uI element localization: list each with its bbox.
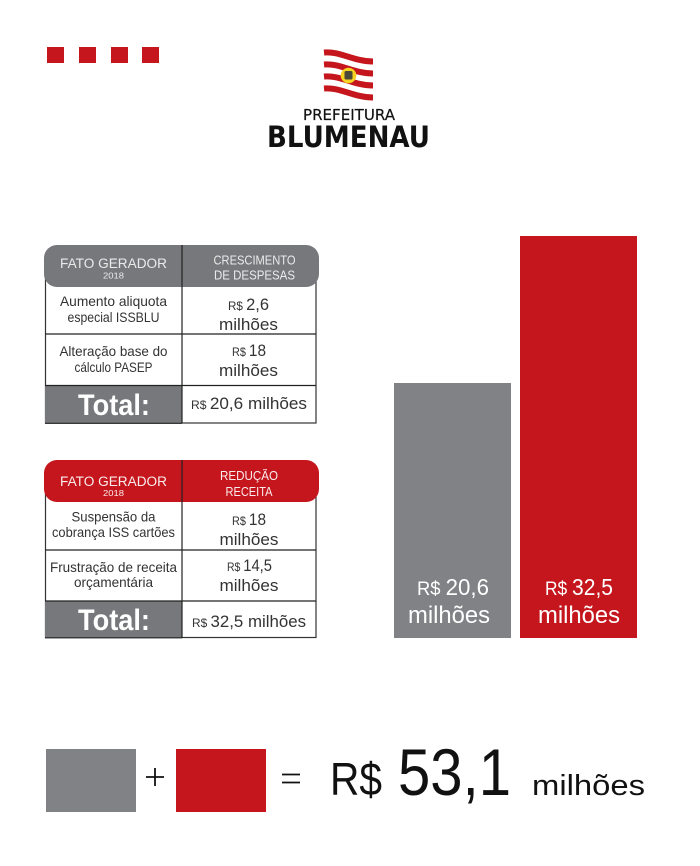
row 2 <box>50 556 278 595</box>
header labels: REDUÇÃO <box>220 469 278 483</box>
row 2: orçamentária <box>74 574 153 590</box>
row 1 <box>52 508 278 549</box>
total row <box>78 604 306 637</box>
total row: Total: <box>78 604 150 637</box>
row 2: cálculo PASEP <box>74 359 152 375</box>
row 2: R$ 14,5 <box>227 556 272 575</box>
row 1: milhões <box>220 530 278 549</box>
logo text: PREFEITURA: PREFEITURA <box>303 106 396 124</box>
total value <box>330 735 645 809</box>
header labels <box>60 254 296 282</box>
row 1: Suspensão da <box>72 508 156 524</box>
bar: despesas 20,6: milhões <box>408 602 490 629</box>
logo text: BLUMENAU: BLUMENAU <box>267 120 430 154</box>
total value: milhões <box>532 770 645 802</box>
total row: R$ 32,5 milhões <box>192 612 306 631</box>
header labels: CRESCIMENTO <box>214 254 296 268</box>
header labels: RECEITA <box>226 485 273 499</box>
logo: Prefeitura Blumenau <box>267 52 430 154</box>
icon: striped flag with crest <box>324 52 373 98</box>
bar: despesas 20,6 <box>394 383 511 638</box>
row 1: Aumento aliquota <box>60 293 167 309</box>
header labels: 2018 <box>103 489 125 498</box>
header labels: DE DESPESAS <box>214 268 295 282</box>
header labels <box>60 469 278 499</box>
bar chart <box>394 236 637 638</box>
legend swatch: red <box>176 749 266 812</box>
row 1: especial ISSBLU <box>68 309 160 325</box>
row 2: R$ 18 <box>232 341 266 360</box>
total row <box>78 389 307 422</box>
total value: 53,1 <box>398 735 511 809</box>
row 1 <box>60 293 278 334</box>
row 1: R$ 18 <box>232 510 266 529</box>
header row, red <box>44 460 319 502</box>
row 1: cobrança ISS cartões <box>52 524 175 540</box>
total row: Total: <box>78 389 150 422</box>
row 2: milhões <box>219 361 278 380</box>
row 2 <box>60 341 278 380</box>
total cell, grey <box>45 385 182 424</box>
header labels: 2018 <box>103 272 125 280</box>
table: redução receita <box>44 460 319 638</box>
decorative red squares <box>47 47 159 63</box>
total value: R$ <box>330 753 382 805</box>
table body <box>46 265 316 423</box>
row 1: milhões <box>219 315 278 334</box>
legend swatch: grey <box>46 749 136 812</box>
row 2: milhões <box>220 576 278 595</box>
bar: despesas 20,6: R$ 20,6 <box>417 574 489 600</box>
row 1: R$ 2,6 <box>228 295 269 314</box>
sum equation <box>46 735 645 812</box>
table: crescimento de despesas <box>44 245 319 424</box>
equals sign <box>282 774 300 782</box>
row 2: Frustração de receita <box>50 559 177 575</box>
header row, grey <box>44 245 319 287</box>
table body <box>46 480 316 638</box>
total cell, grey <box>45 601 182 638</box>
header labels: FATO GERADOR <box>60 256 167 271</box>
bar: receita 32,5: R$ 32,5 <box>545 574 613 600</box>
header labels: FATO GERADOR <box>60 474 167 489</box>
row 2: Alteração base do <box>60 343 168 359</box>
plus sign <box>146 768 164 786</box>
bar: receita 32,5 <box>520 236 637 638</box>
total row: R$ 20,6 milhões <box>191 394 307 413</box>
bar: receita 32,5: milhões <box>538 602 620 629</box>
